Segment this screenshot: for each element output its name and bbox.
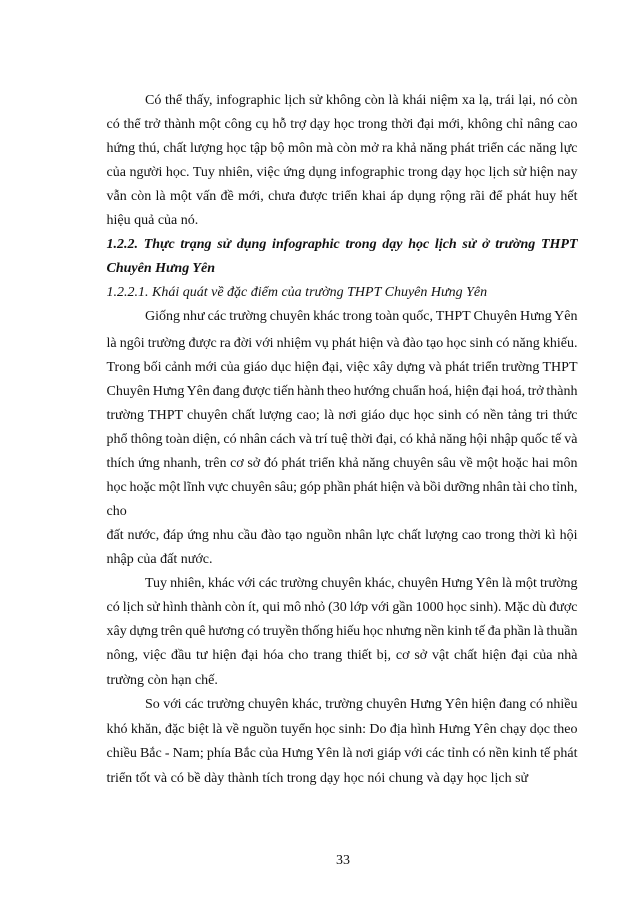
paragraph: school history and scale: nông, việc đầu tư hiện đại hóa cho trang thiết bị, cơ sở vật chất hiện đại của nhà: [106, 648, 578, 663]
paragraph: school history and scale: trường còn hạn chế.: [106, 673, 218, 688]
paragraph: school history and scale: xây dựng trên quê hương có truyền thống hiếu học nhưng nền kinh tế đa phần là thuần: [106, 624, 578, 639]
paragraph: infographic in history teaching: Có thể thấy, infographic lịch sử không còn là khái niệm xa lạ, trái lại, nó còn: [145, 93, 578, 108]
paragraph: school history and scale: Tuy nhiên, khác với các trường chuyên khác, chuyên Hưng Yên là một trường: [145, 576, 578, 591]
paragraph: school overview: Trong bối cảnh mới của giáo dục hiện đại, việc xây dựng và phát triển trường THPT: [106, 360, 578, 375]
paragraph: school overview: học hoặc một lĩnh vực chuyên sâu; góp phần phát hiện và bồi dưỡng nhân tài cho tỉnh,: [106, 480, 578, 495]
paragraph: infographic in history teaching: [106, 93, 578, 228]
paragraph: school overview: đất nước, đáp ứng nhu cầu đào tạo nguồn nhân lực chất lượng cao trong thời kì hội: [106, 528, 578, 543]
heading: section 1.2.2.1: 1.2.2.1. Khái quát về đặc điểm của trường THPT Chuyên Hưng Yên: [106, 285, 487, 300]
paragraph: admissions difficulties: [106, 697, 578, 786]
page number: 33: [336, 853, 350, 868]
paragraph: school history and scale: có lịch sử hình thành còn ít, qui mô nhỏ (30 lớp với gần 1000 học sinh). Mặc dù được: [106, 600, 578, 615]
paragraph: school overview: trường THPT chuyên chất lượng cao; là nơi giáo dục học sinh có nền tảng tri thức: [106, 408, 578, 423]
paragraph: school overview: Giống như các trường chuyên khác trong toàn quốc, THPT Chuyên Hưng Yên: [145, 309, 578, 324]
paragraph: infographic in history teaching: của người học. Tuy nhiên, việc ứng dụng infographic trong dạy học lịch sử hiện nay: [106, 165, 578, 180]
paragraph: admissions difficulties: chiều Bắc - Nam; phía Bắc của Hưng Yên là nơi giáp với các tỉnh có nền kinh tế phát: [106, 746, 578, 761]
paragraph: admissions difficulties: triển tốt và có bề dày thành tích trong dạy học nói chung và dạy học lịch sử: [106, 771, 528, 786]
paragraph: school history and scale: [106, 576, 578, 688]
paragraph: school overview: thích ứng nhanh, trên cơ sở đó phát triển khả năng chuyên sâu về một hoặc hai môn: [106, 456, 578, 471]
paragraph: school overview: nhập của đất nước.: [106, 552, 212, 567]
paragraph: school overview: cho: [106, 504, 127, 519]
paragraph: school overview: [106, 309, 578, 567]
paragraph: admissions difficulties: khó khăn, đặc biệt là về nguồn tuyển học sinh: Do địa hình Hưng Yên chạy dọc theo: [106, 722, 578, 737]
paragraph: school overview: Chuyên Hưng Yên đang được tiến hành theo hướng chuẩn hoá, hiện đại hoá, trở thành: [106, 384, 578, 399]
paragraph: infographic in history teaching: hứng thú, chất lượng học tập bộ môn mà còn mở ra khả năng phát triển các năng lực: [106, 141, 578, 156]
paragraph: infographic in history teaching: có thể trở thành một công cụ hỗ trợ dạy học trong thời đại mới, không chỉ nâng cao: [106, 117, 578, 132]
paragraph: infographic in history teaching: vẫn còn là một vấn đề mới, chưa được triển khai áp dụng rộng rãi để phát huy hết: [106, 189, 578, 204]
heading: section 1.2.2: 1.2.2. Thực trạng sử dụng infographic trong dạy học lịch sử ở trường THPT: [106, 237, 578, 252]
paragraph: school overview: phổ thông toàn diện, có nhân cách và trí tuệ thời đại, có khả năng hội nhập quốc tế và: [106, 432, 578, 447]
paragraph: admissions difficulties: So với các trường chuyên khác, trường chuyên Hưng Yên hiện đang có nhiều: [145, 697, 578, 712]
paragraph: infographic in history teaching: hiệu quả của nó.: [106, 213, 198, 228]
heading: section 1.2.2: Chuyên Hưng Yên: [106, 261, 215, 276]
heading: section 1.2.2: [106, 237, 578, 276]
paragraph: school overview: là ngôi trường được ra đời với nhiệm vụ phát hiện và đào tạo học sinh có năng khiếu.: [106, 336, 578, 351]
